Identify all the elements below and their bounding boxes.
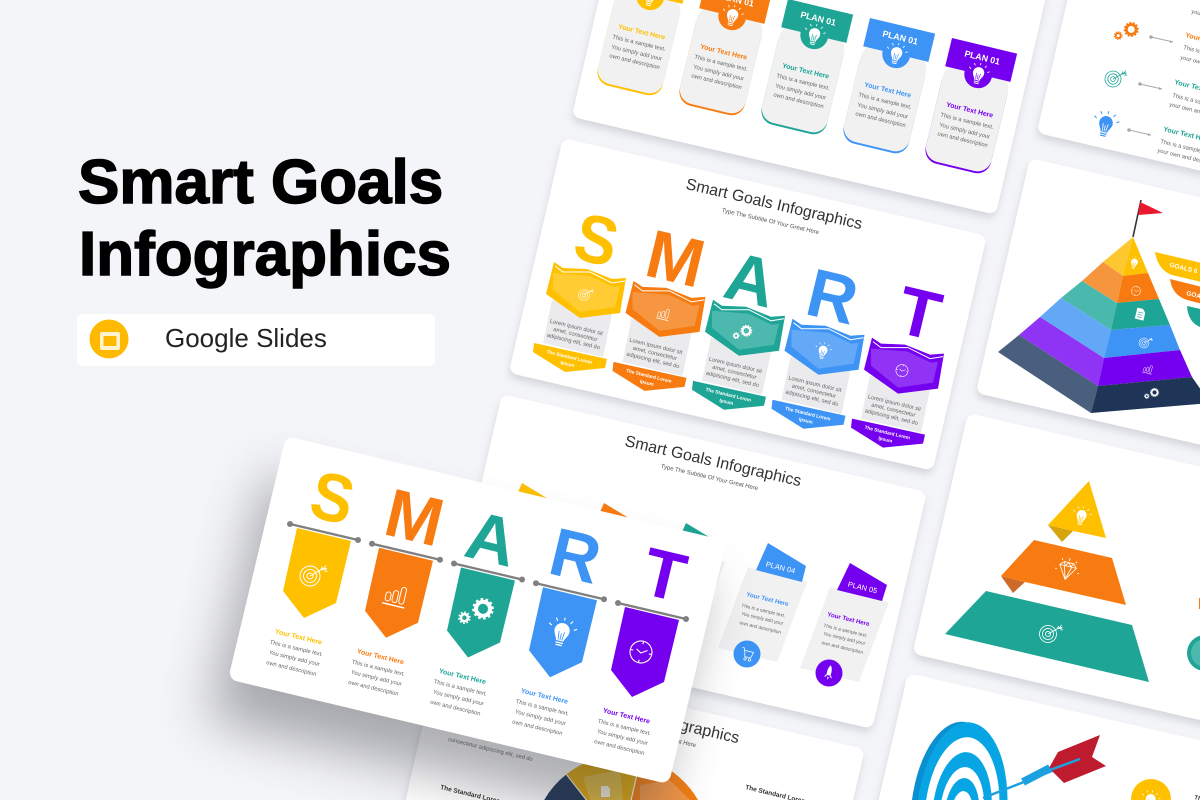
- chevron column A: adipiscing elit, sed do: [705, 371, 759, 389]
- chevron column R: amet, consectetur: [791, 384, 837, 400]
- target board: [903, 718, 1015, 800]
- tier 1: [1048, 481, 1106, 542]
- chevron column R: R: [800, 254, 865, 340]
- chevron column S: amet, consectetur: [553, 327, 598, 343]
- banner S: Your Text Here: [274, 629, 323, 647]
- panel: top plan cards slide: [572, 0, 1050, 215]
- plan tab 5: [800, 563, 889, 686]
- goal tag 6: [1155, 252, 1200, 284]
- chevron column S: S: [567, 198, 626, 282]
- flag: [1133, 200, 1163, 237]
- chevron column S: Lorem ipsum dolor sit: [549, 319, 604, 337]
- banner S: S: [303, 456, 362, 540]
- plan card 4: [841, 18, 935, 156]
- chevron column A: [692, 237, 785, 410]
- plan tab 5: This is a sample text.: [823, 623, 868, 639]
- panel: timeline list slide: [1037, 0, 1200, 231]
- chevron column R: Ipsum: [798, 417, 813, 426]
- plan tab 4: [718, 543, 807, 668]
- chevron column T: Ipsum: [878, 436, 893, 445]
- banner A: A: [459, 496, 524, 582]
- banner M: own and description: [347, 680, 399, 698]
- banner R: [511, 513, 608, 737]
- banner T: T: [635, 533, 693, 617]
- list row: target: [1103, 66, 1200, 123]
- dart: [983, 735, 1106, 798]
- banner A: This is a sample text.: [433, 679, 488, 698]
- banner T: This is a sample text.: [597, 719, 652, 737]
- banner T: Your Text Here: [602, 708, 651, 726]
- panel: plan tabs slide: [447, 394, 927, 729]
- banner S: This is a sample text.: [269, 640, 324, 658]
- banner A: Your Text Here: [438, 668, 487, 686]
- plan card 1: This is a sample text.: [612, 35, 666, 53]
- pie chart: [532, 755, 710, 800]
- front slide shadow: [208, 476, 707, 800]
- plan tab 4: You simply add your: [741, 611, 784, 627]
- chevron column T: amet, consectetur: [871, 402, 916, 419]
- goal tag 4: [1187, 306, 1200, 329]
- right edge fragments: [1187, 598, 1200, 671]
- panel: three-tier pyramid slide: [912, 413, 1200, 752]
- plan card 4: This is a sample text.: [858, 93, 912, 111]
- icon: slides logo: [90, 320, 128, 358]
- slide subtitle: Type The Subtitle Of Your Great Here: [721, 208, 820, 236]
- banner R: You simply add your: [514, 709, 566, 727]
- plan card 2: This is a sample text.: [694, 55, 748, 73]
- chevron column A: The Standard Lorem: [705, 387, 752, 404]
- plan card 1: You simply add your: [611, 45, 663, 63]
- banner A: You simply add your: [432, 690, 484, 708]
- plan card 1: Your Text Here: [617, 24, 666, 42]
- panel: pie chart slide: [385, 651, 865, 800]
- banner T: You simply add your: [596, 729, 648, 747]
- slide heading: Smart Goals Infographics: [561, 690, 741, 747]
- list row: gears: [1114, 19, 1200, 76]
- chevron column M: The Standard Lorem: [625, 368, 672, 385]
- badge label: Google Slides: [165, 323, 327, 353]
- chevron column M: [612, 215, 712, 391]
- chevron column S: adipiscing elit, sed do: [546, 333, 600, 351]
- banner R: R: [543, 513, 608, 599]
- plan card 4: You simply add your: [857, 103, 909, 121]
- banner T: [593, 533, 693, 757]
- pyramid: [998, 237, 1200, 413]
- panel: six-level pyramid slide: [976, 158, 1200, 491]
- plan card 2: You simply add your: [693, 65, 745, 83]
- chevron column T: adipiscing elit, sed do: [864, 408, 918, 427]
- banner R: This is a sample text.: [515, 699, 570, 718]
- banner S: [265, 456, 362, 678]
- plan card 5: Your Text Here: [945, 102, 994, 120]
- chevron column A: Lorem ipsum dolor sit: [708, 357, 763, 375]
- plan tabs hidden behind the front slide: [472, 483, 725, 642]
- plan card 5: [923, 38, 1017, 176]
- plan tab 4: own and description: [739, 620, 782, 636]
- plan card 3: This is a sample text.: [776, 74, 830, 92]
- plan card 2: [677, 0, 771, 118]
- chevron column T: Lorem ipsum dolor sit: [867, 394, 922, 413]
- panel: dart target slide: [853, 673, 1200, 800]
- banner S: own and description: [265, 660, 317, 678]
- banner M: You simply add your: [350, 670, 402, 688]
- slide subtitle: Type The Subtitle Of Your Great Here: [660, 464, 759, 492]
- plan card 1: own and description: [609, 53, 660, 71]
- chevron column A: A: [718, 237, 783, 323]
- chevron column A: amet, consectetur: [712, 365, 757, 381]
- plan card 2: own and description: [691, 73, 742, 91]
- banner T: own and description: [593, 739, 645, 757]
- plan card 5: own and description: [937, 131, 988, 149]
- tier 3: [945, 591, 1149, 682]
- list row: bulb: [1091, 108, 1200, 169]
- plan card 2: Your Text Here: [699, 44, 748, 62]
- plan card 4: PLAN 01: [881, 29, 919, 47]
- plan tab 5: own and description: [821, 640, 864, 656]
- chevron column T: [851, 272, 948, 448]
- banner S: You simply add your: [268, 650, 320, 668]
- chevron column T: The Standard Lorem: [864, 425, 911, 441]
- plan tab 5: You simply add your: [823, 631, 866, 647]
- chevron column M: M: [639, 215, 712, 303]
- title: Infographics: [79, 220, 451, 289]
- banner A: own and description: [429, 700, 481, 717]
- plan card 4: Your Text Here: [863, 82, 912, 100]
- banner M: M: [378, 474, 451, 561]
- chevron column S: Ipsum: [560, 360, 575, 369]
- chevron column A: Ipsum: [719, 398, 734, 407]
- plan tab 4: This is a sample text.: [741, 603, 786, 619]
- plan tab 4: Your Text Here: [746, 591, 790, 608]
- plan card 3: own and description: [773, 92, 824, 110]
- goal tag 5: [1170, 279, 1200, 306]
- plan card 5: This is a sample text.: [940, 113, 994, 131]
- plan card 4: own and description: [855, 111, 906, 129]
- plan card 3: PLAN 01: [799, 10, 837, 28]
- banner M: This is a sample text.: [351, 660, 406, 678]
- chevron column R: The Standard Lorem: [784, 406, 831, 423]
- plan card 1: [595, 0, 689, 98]
- plan card 5: PLAN 01: [963, 49, 1001, 67]
- plan card 5: You simply add your: [939, 123, 991, 141]
- plan tab 4: PLAN 04: [765, 560, 796, 575]
- chevron column M: Ipsum: [639, 379, 654, 388]
- banner A: [429, 496, 525, 717]
- bulb badge: [1131, 779, 1171, 800]
- plan tab 5: Your Text Here: [827, 611, 871, 628]
- chevron column M: amet, consectetur: [632, 346, 678, 362]
- plan card 3: Your Text Here: [781, 63, 830, 81]
- banner R: own and description: [511, 719, 563, 737]
- chevron column R: adipiscing elit, sed do: [785, 389, 839, 408]
- title: [78, 148, 451, 289]
- banner R: Your Text Here: [520, 688, 569, 706]
- badge: Google Slides: [77, 314, 435, 366]
- plan card 3: You simply add your: [775, 84, 827, 102]
- panel: front SMART banner slide: [228, 436, 727, 784]
- banner M: Your Text Here: [356, 648, 405, 666]
- slide heading: Smart Goals Infographics: [684, 176, 864, 233]
- chevron column T: T: [890, 272, 948, 356]
- slide heading: Smart Goals Infographics: [623, 433, 803, 490]
- chevron column R: [772, 254, 865, 429]
- slide subtitle: Type The Subtitle Of Your Great Here: [598, 721, 697, 749]
- tier 2: [1001, 540, 1126, 605]
- plan card 3: [759, 0, 853, 137]
- panel: SMART chevrons slide: [509, 138, 987, 471]
- chevron column R: Lorem ipsum dolor sit: [788, 375, 842, 394]
- chevron column S: [533, 198, 626, 372]
- goal tag 6: GOALS 6: [1169, 262, 1198, 275]
- chevron column M: adipiscing elit, sed do: [626, 352, 680, 370]
- chevron column S: The Standard Lorem: [546, 349, 593, 366]
- plan tab 5: PLAN 05: [847, 580, 878, 595]
- text fragment: consectetur adipiscing elit, sed do: [447, 737, 533, 763]
- chevron column M: Lorem ipsum dolor sit: [629, 338, 683, 356]
- banner M: [347, 474, 451, 698]
- title: Smart Goals: [78, 148, 443, 217]
